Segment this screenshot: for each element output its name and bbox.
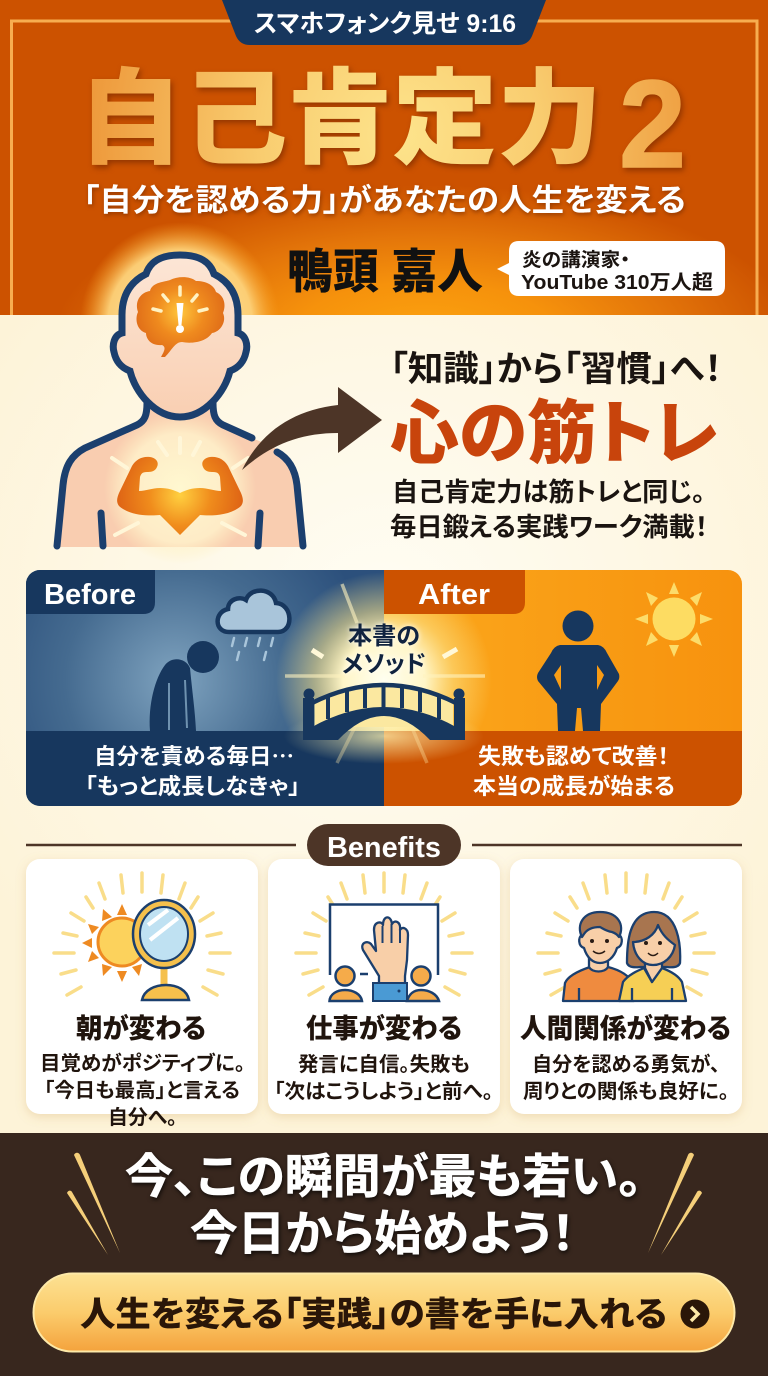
icon: confident person <box>537 610 619 731</box>
card text: 発言に自信。失敗も <box>298 1053 470 1076</box>
lead line: 「知識」から「習慣」へ！ <box>390 350 722 389</box>
button: get the book <box>34 1274 734 1352</box>
label: the method <box>342 623 426 678</box>
after tab: After <box>418 579 490 611</box>
decorative burst lines right <box>648 1153 702 1255</box>
card text: 自分へ。 <box>108 1106 177 1129</box>
label: benefits: Benefits <box>327 832 441 864</box>
after caption: 本当の成長が始まる <box>473 774 675 799</box>
card: morning <box>26 859 258 1129</box>
title: 2 <box>619 56 686 194</box>
headline: 今、この瞬間が最も若い。 <box>125 1150 642 1203</box>
before caption: 「もっと成長しなきゃ」 <box>85 774 300 799</box>
method glow <box>279 575 487 731</box>
description: 毎日鍛える実践ワーク満載！ <box>390 512 708 542</box>
callout: author credentials: 炎の講演家・ <box>522 249 630 271</box>
arrow: person to training headline <box>242 387 382 470</box>
icon: two smiling people <box>563 912 686 1001</box>
card: work <box>268 859 500 1114</box>
card text <box>523 1052 729 1103</box>
icon: sun <box>635 582 713 657</box>
before footer band <box>26 731 384 806</box>
page background <box>0 315 768 1135</box>
button: get the book: 人生を変える「実践」の書を手に入れる <box>80 1296 667 1334</box>
card text <box>40 1051 245 1129</box>
illustration: person with brain and muscle heart <box>57 222 303 564</box>
panel: call to action <box>0 1133 768 1376</box>
label: benefits <box>307 824 461 866</box>
card title: 朝が変わる <box>76 1013 206 1044</box>
card: relationships <box>510 859 742 1114</box>
icon: flexing muscle heart <box>112 438 248 535</box>
after footer band <box>384 731 742 806</box>
title: 自己肯定力 <box>78 62 602 178</box>
card text <box>274 1053 493 1103</box>
icon: sun and mirror <box>82 900 195 1000</box>
after tab <box>384 570 525 614</box>
icon: rain cloud <box>218 591 289 660</box>
card text: 「今日も最高」と言える <box>44 1079 240 1102</box>
before caption: 自分を責める毎日… <box>94 739 294 771</box>
callout: author credentials <box>497 241 725 296</box>
header background with amber glow <box>0 0 768 315</box>
card text: 自分を認める勇気が、 <box>532 1052 720 1076</box>
badge: format tab: スマホフォンク見せ 9:16 <box>254 10 516 38</box>
panel: header <box>12 0 757 315</box>
heading: mental training: 心の筋トレ <box>390 395 718 472</box>
icon: bridge <box>303 685 465 740</box>
person head <box>113 255 247 417</box>
icon: raised hand in meeting <box>330 904 439 1001</box>
callout: author credentials: YouTube 310万人超 <box>521 271 713 294</box>
after caption <box>473 744 675 799</box>
card title: 仕事が変わる <box>306 1013 462 1044</box>
badge: format tab <box>222 0 546 45</box>
panel: before and after <box>26 570 742 806</box>
description <box>390 477 708 542</box>
icon: brain with exclamation <box>137 277 225 357</box>
person body <box>57 400 303 564</box>
card title: 人間関係が変わる <box>520 1013 731 1044</box>
before tab: Before <box>44 579 136 611</box>
icon: slumped person <box>150 641 219 731</box>
card text: 目覚めがポジティブに。 <box>40 1051 245 1075</box>
icon: chevron circle <box>680 1300 710 1328</box>
headline <box>125 1150 642 1260</box>
subtitle: 「自分を認める力」があなたの人生を変える <box>83 183 686 218</box>
benefits section rule <box>26 844 742 846</box>
card text: 周りとの関係も良好に。 <box>523 1080 729 1103</box>
text block: mental training <box>390 350 722 542</box>
label: the method: メソッド <box>342 651 426 678</box>
description: 自己肯定力は筋トレと同じ。 <box>392 477 705 507</box>
card text: 「次はこうしよう」と前へ。 <box>274 1080 493 1103</box>
before tab <box>26 570 155 614</box>
author name: 鴨頭 嘉人 <box>287 245 483 298</box>
label: the method: 本書の <box>348 623 420 650</box>
before caption <box>88 744 296 796</box>
after caption: 失敗も認めて改善！ <box>478 744 669 769</box>
headline: 今日から始めよう！ <box>190 1207 575 1260</box>
decorative burst lines left <box>67 1153 120 1255</box>
